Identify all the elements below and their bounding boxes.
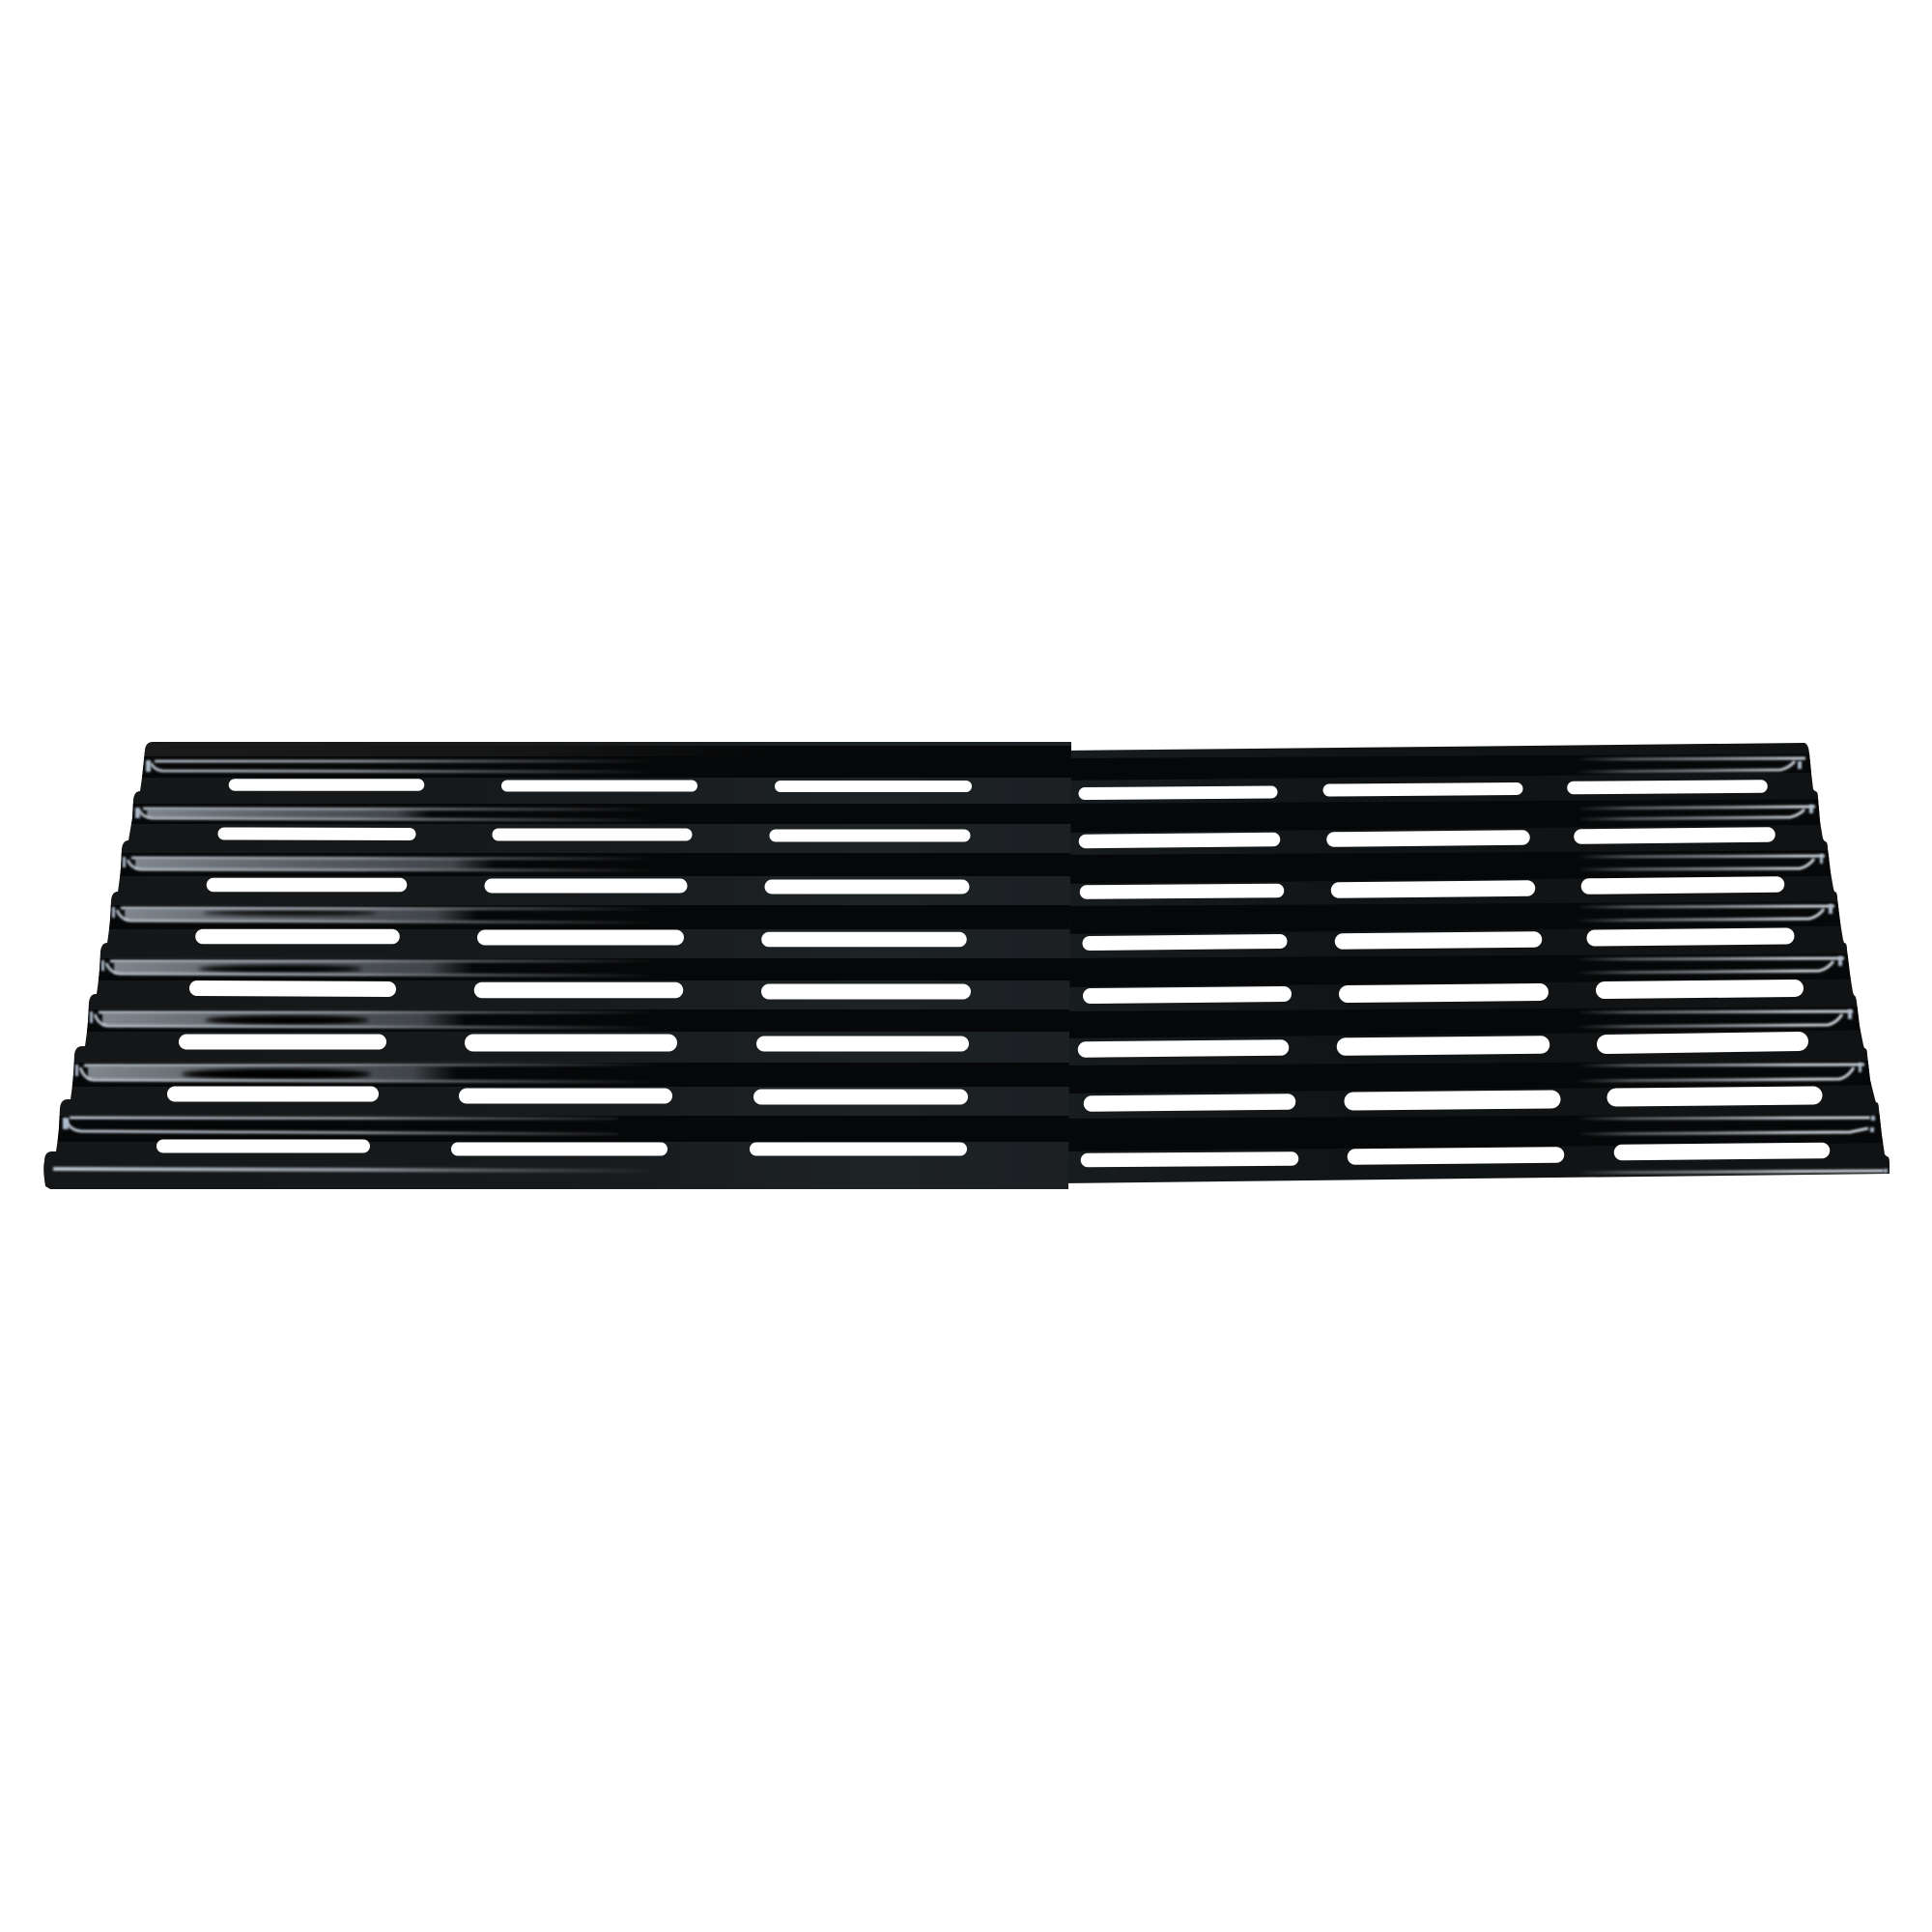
left panel end notches: [63, 760, 151, 1129]
left panel glossy sheen: [88, 810, 496, 1080]
right panel silhouette: [1063, 743, 1889, 1183]
left panel dark grooves: [39, 746, 1072, 1142]
panel: left grate section: [39, 742, 1072, 1189]
left panel silhouette: [43, 742, 1071, 1189]
panel: right grate section: [1063, 743, 1893, 1183]
right panel slots: [1085, 786, 1822, 1160]
dark reflections in the sheen: [182, 910, 377, 1080]
left panel glossy highlights: [53, 761, 657, 1171]
right panel dark grooves: [1063, 753, 1893, 1151]
right panel end notches: [1798, 761, 1888, 1173]
grill grate assembly: [39, 742, 1893, 1189]
left panel slots: [163, 784, 966, 1150]
product image: expandable black slotted grill grate: [43, 742, 1889, 1189]
right panel glossy highlights: [1579, 758, 1884, 1173]
top rod cap shading: [145, 743, 635, 756]
